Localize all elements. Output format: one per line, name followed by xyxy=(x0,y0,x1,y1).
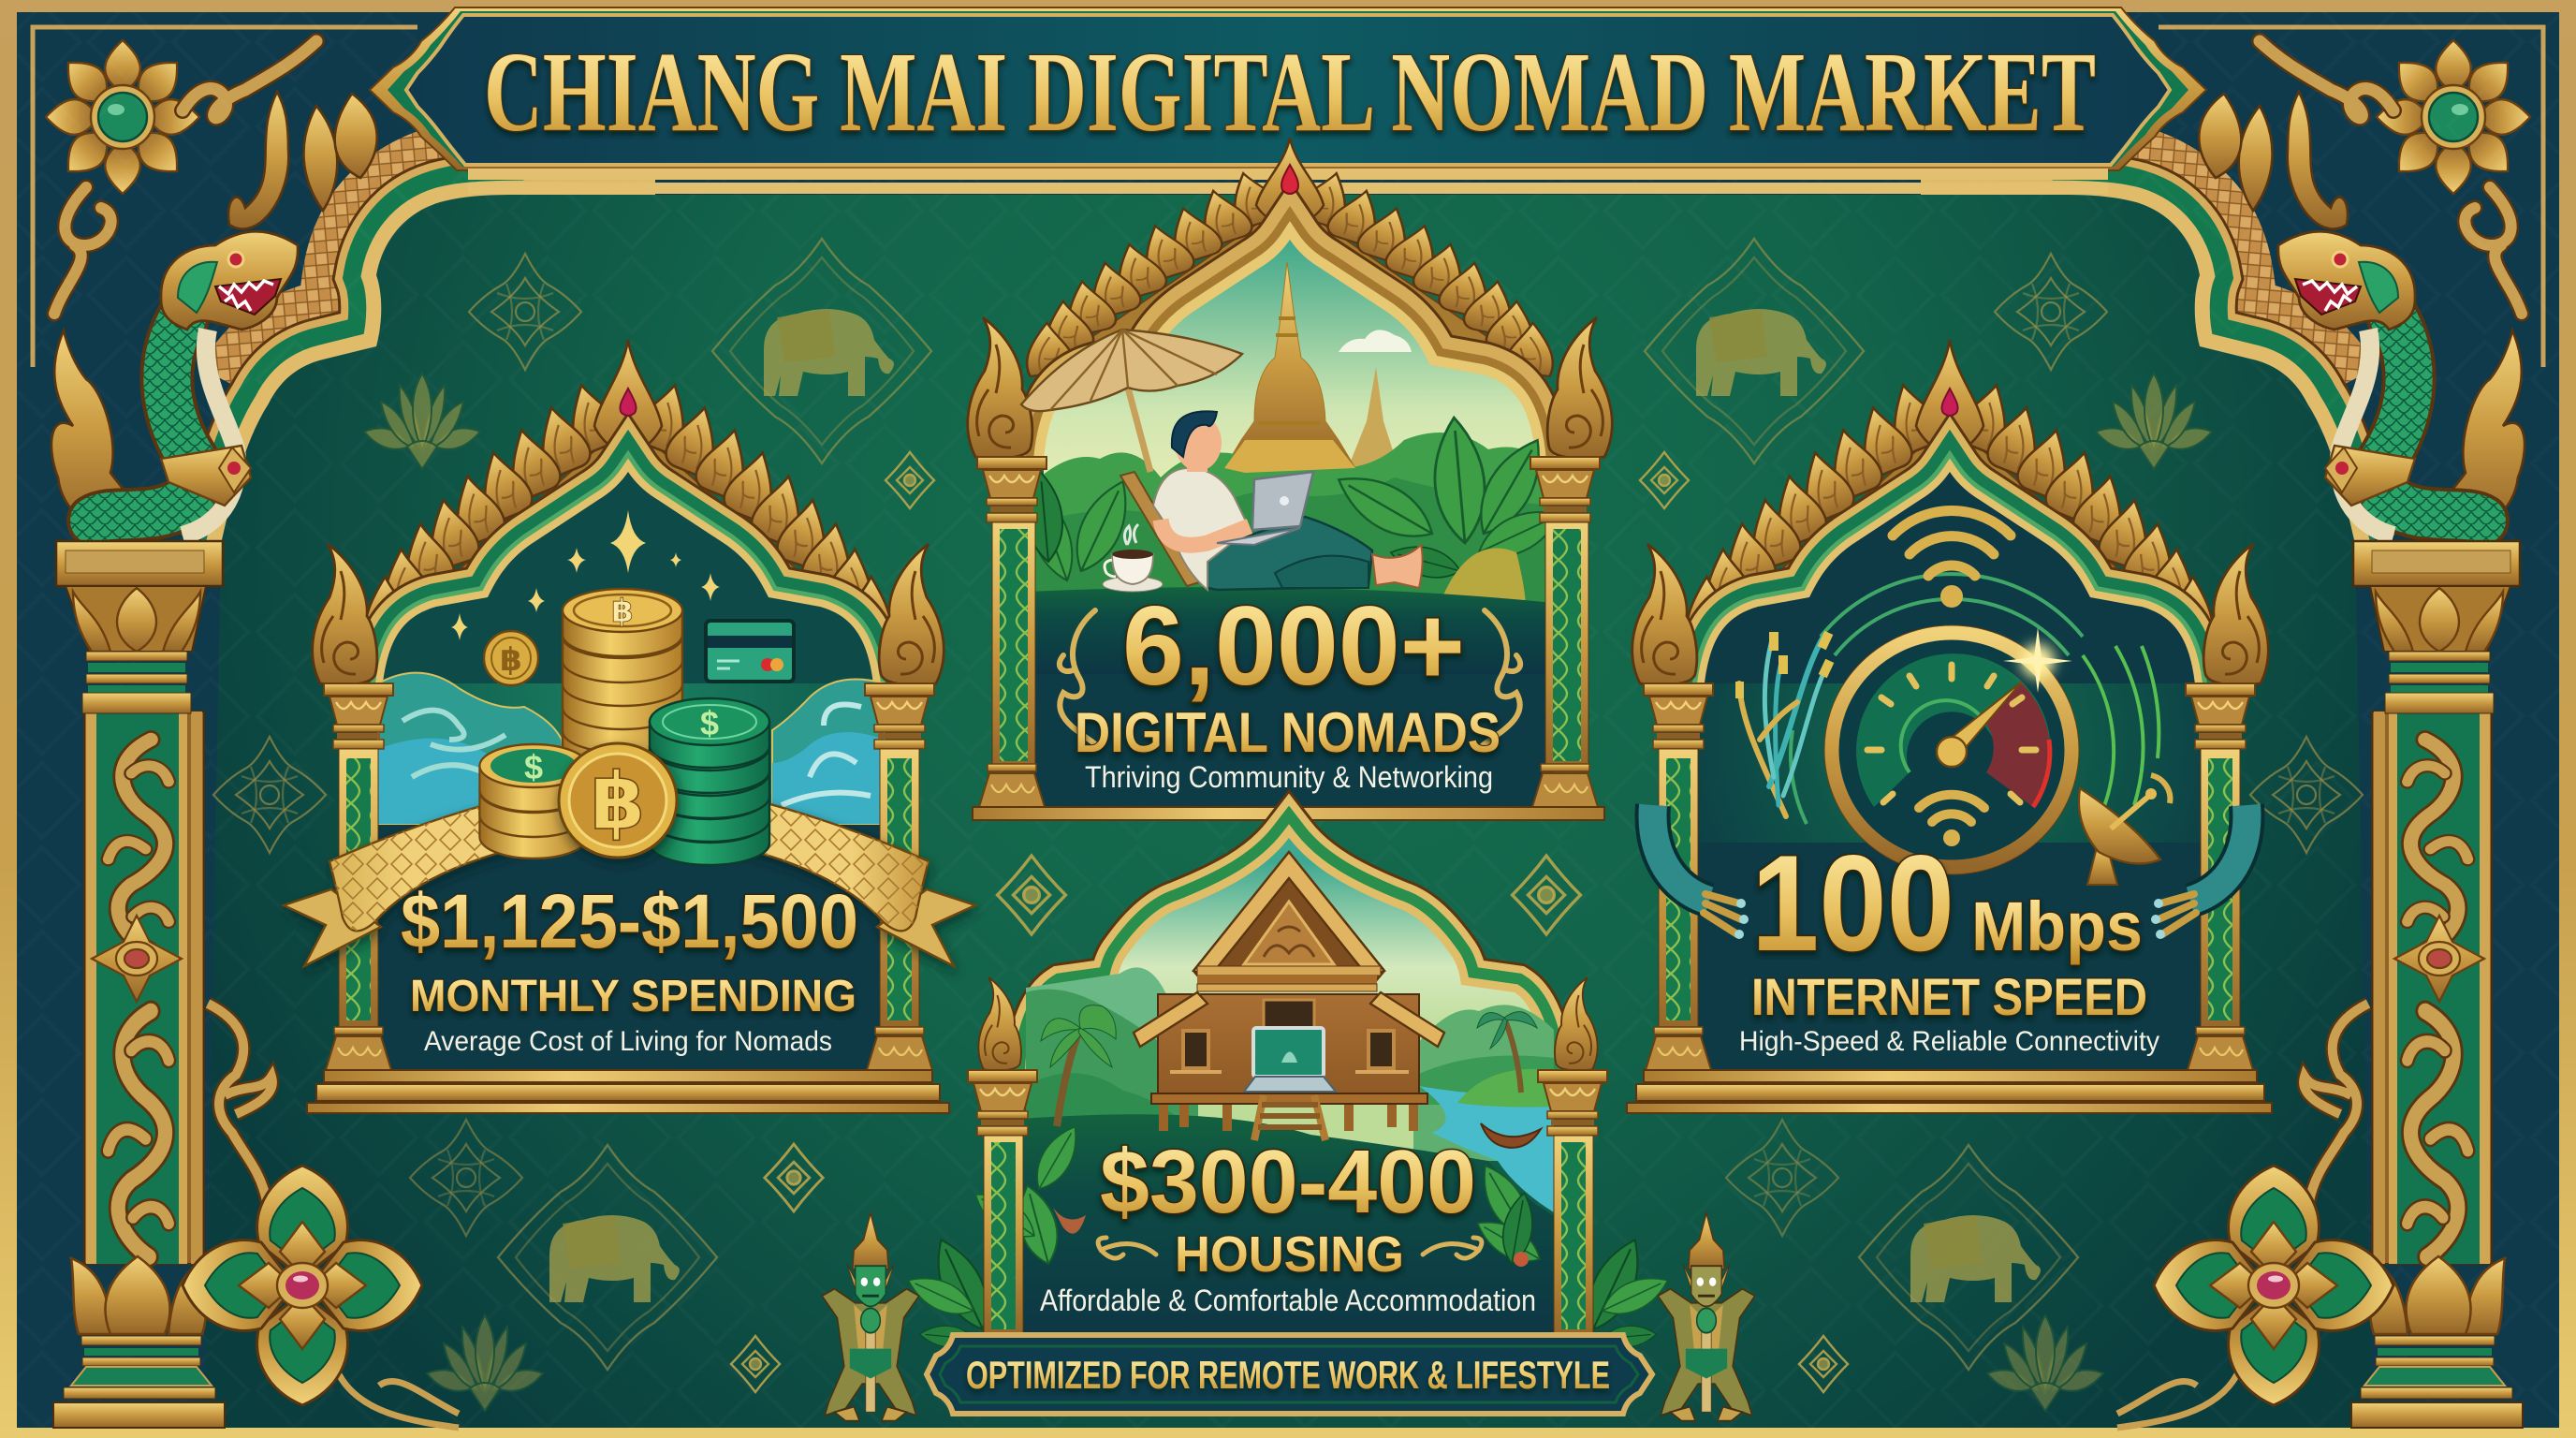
arch xyxy=(1033,838,1544,1077)
ribbon banner xyxy=(284,782,975,966)
small gold stack xyxy=(479,744,588,858)
golden stupas xyxy=(1224,262,1398,468)
description: High-Speed & Reliable Connectivity xyxy=(1739,1026,2159,1057)
large baht coin: ฿ xyxy=(591,756,645,847)
fiber optic cable ends xyxy=(1653,805,2247,939)
right arch band xyxy=(1921,191,2355,544)
river xyxy=(1419,1086,1554,1212)
flourishes xyxy=(1098,1238,1482,1258)
label: HOUSING xyxy=(1175,1226,1404,1283)
side finials xyxy=(968,317,1612,459)
sky and hills scene xyxy=(1026,838,1554,1161)
description: Thriving Community & Networking xyxy=(1085,760,1493,794)
lower wifi xyxy=(1919,795,1984,846)
flourishes xyxy=(1060,610,1520,745)
tiered base xyxy=(307,1070,949,1113)
stilt house xyxy=(1134,852,1444,1140)
panel: monthly spending xyxy=(284,340,975,1113)
credit card xyxy=(706,621,794,682)
small gold stack: $ xyxy=(524,748,543,786)
left ornamental pillar xyxy=(53,541,225,1428)
left arch band xyxy=(221,191,655,544)
panel: housing xyxy=(902,838,1674,1349)
fiber cables xyxy=(1739,637,1825,816)
top-right corner ornament xyxy=(2159,27,2543,367)
background motifs xyxy=(213,239,2363,1411)
label: MONTHLY SPENDING xyxy=(410,972,856,1021)
palm trees xyxy=(1041,1005,1537,1126)
guardian left xyxy=(822,1213,919,1421)
bottom tagline banner xyxy=(927,1335,1652,1414)
waves xyxy=(378,673,885,824)
stupa base over foliage xyxy=(1224,440,1355,473)
coin stack xyxy=(563,589,682,776)
small gold coin xyxy=(484,631,538,685)
laptop on porch xyxy=(1244,1028,1336,1092)
coffee cup xyxy=(1103,524,1163,592)
tagline text: OPTIMIZED FOR REMOTE WORK & LIFESTYLE xyxy=(966,1353,1610,1397)
ground and text backdrop xyxy=(1028,592,1554,807)
nomad with laptop xyxy=(1120,411,1423,590)
description: Average Cost of Living for Nomads xyxy=(424,1026,832,1057)
green coin stack: $ xyxy=(700,704,719,742)
ruby gem xyxy=(1281,165,1298,194)
sky xyxy=(1044,240,1536,807)
right ornamental pillar xyxy=(2351,541,2523,1428)
lower backdrop xyxy=(1022,1114,1556,1339)
right lotus flower medallion xyxy=(2117,1004,2393,1428)
plants xyxy=(1017,416,1568,609)
coin stack: ฿ xyxy=(611,593,634,630)
small gold coin: ฿ xyxy=(500,641,522,679)
guardian right xyxy=(1658,1213,1755,1421)
wifi icon xyxy=(1893,510,2011,608)
columns xyxy=(324,683,934,1070)
left lotus flower medallion xyxy=(183,1004,459,1428)
value: $300-400 xyxy=(1100,1132,1476,1232)
columns xyxy=(968,1070,1607,1334)
base xyxy=(973,807,1604,820)
green coin stack xyxy=(650,698,769,865)
river island xyxy=(1457,1069,1554,1107)
sparkles xyxy=(451,510,720,640)
panel: digital nomads xyxy=(968,138,1612,820)
columns xyxy=(977,457,1600,807)
panel: internet speed xyxy=(1627,340,2272,1113)
ruby gem xyxy=(620,389,637,416)
ruby gem xyxy=(1941,389,1958,416)
side finials xyxy=(313,544,944,685)
label: INTERNET SPEED xyxy=(1751,967,2147,1026)
left naga serpent xyxy=(51,92,377,536)
right naga serpent xyxy=(2199,92,2525,536)
description: Affordable & Comfortable Accommodation xyxy=(1040,1284,1536,1317)
speedometer gauge xyxy=(1825,626,2078,873)
green central field xyxy=(204,195,2372,1428)
columns xyxy=(1644,683,2255,1070)
panel backdrop xyxy=(370,472,886,1071)
large baht coin xyxy=(559,743,677,858)
label: DIGITAL NOMADS xyxy=(1075,701,1500,764)
value: 100 xyxy=(1751,827,1954,979)
value: 6,000+ xyxy=(1122,583,1465,709)
panel backdrop xyxy=(1690,472,2210,1071)
top-left corner ornament xyxy=(33,27,417,367)
value: $1,125-$1,500 xyxy=(401,879,858,964)
double gold rail xyxy=(468,174,2108,188)
foliage xyxy=(967,1120,1547,1271)
jungle background xyxy=(1030,433,1549,618)
outer leaves xyxy=(902,1232,1674,1349)
cloud xyxy=(1339,330,1412,352)
signal rings xyxy=(1791,574,2159,824)
side finials xyxy=(1632,544,2268,685)
boat xyxy=(1481,1123,1541,1148)
satellite dish xyxy=(2079,775,2170,885)
ground gradient xyxy=(1028,587,1554,674)
side finials xyxy=(978,977,1598,1070)
parasol xyxy=(1021,330,1242,472)
unit: Mbps xyxy=(1971,888,2143,965)
title banner xyxy=(370,7,2206,188)
tiered base xyxy=(1627,1070,2272,1113)
